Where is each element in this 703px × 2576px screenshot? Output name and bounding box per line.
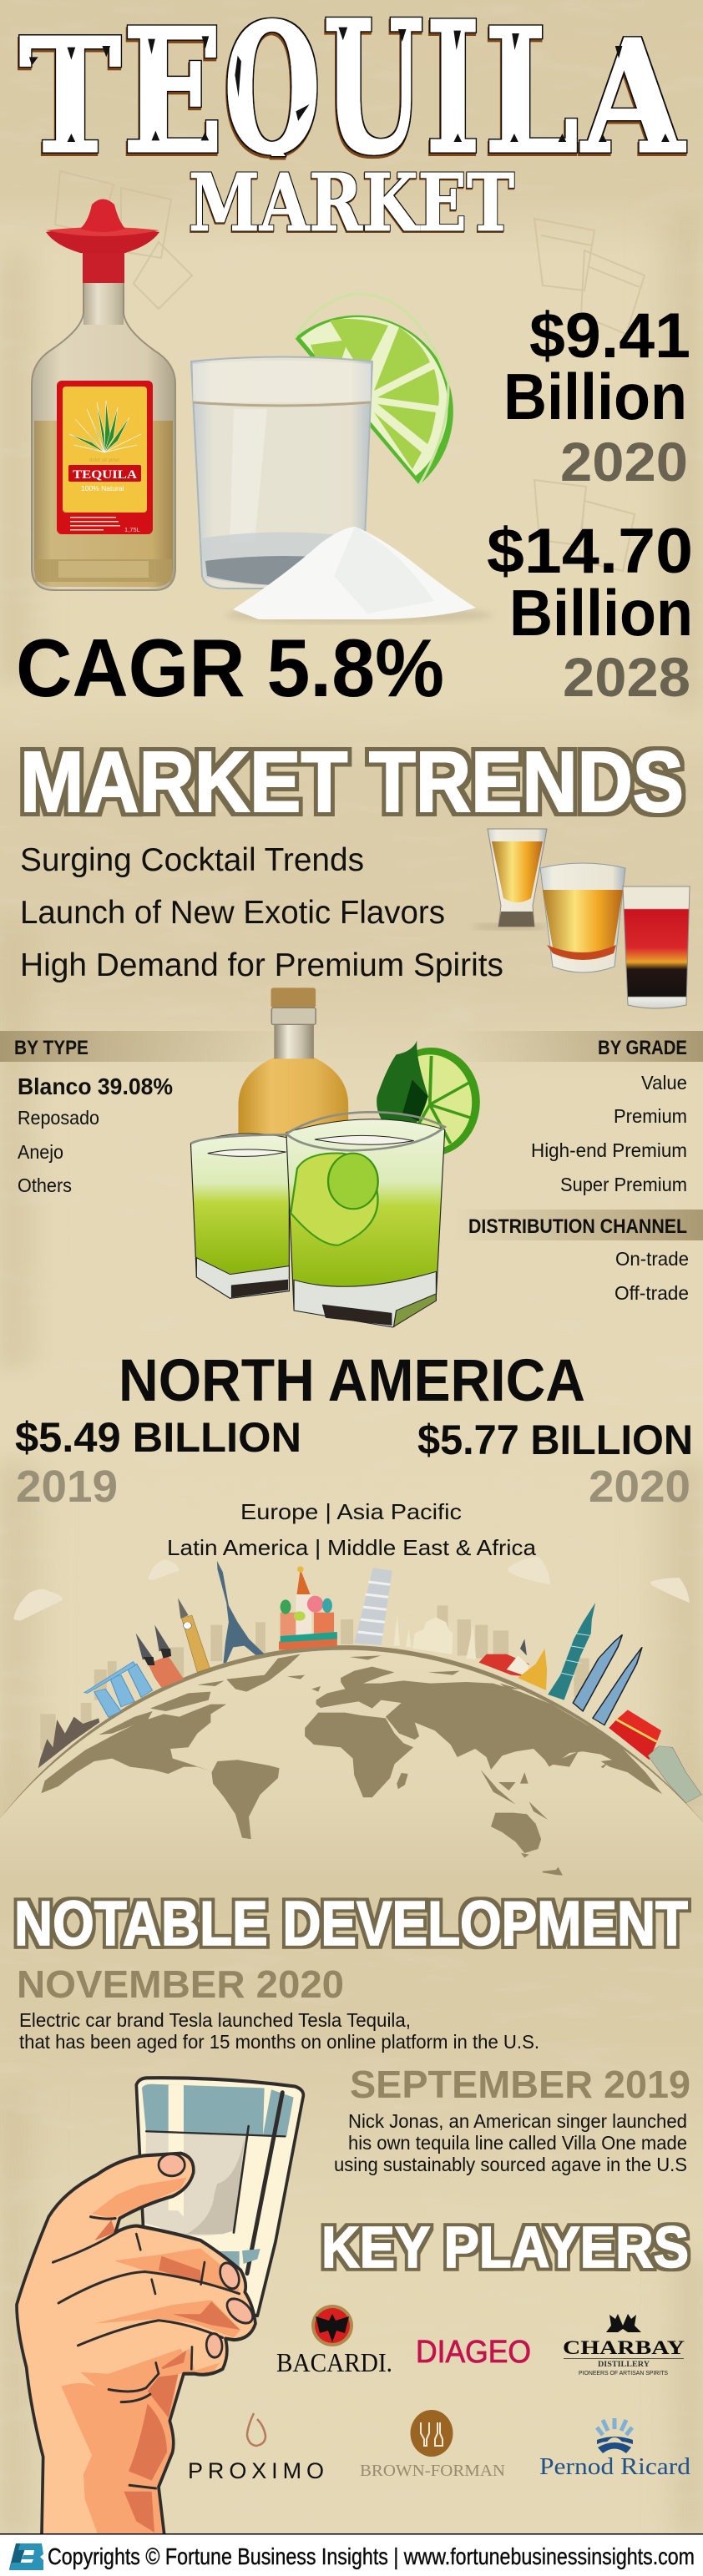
illustration: hand holding shot glass (17, 2078, 303, 2534)
continents (41, 1654, 662, 1876)
illustration: salt pile (225, 527, 493, 624)
other regions: Latin America | Middle East & Africa (167, 1535, 537, 1560)
label agave plant (69, 401, 141, 452)
segment list: by grade: Premium (614, 1105, 687, 1127)
market size 2028: $14.70 (487, 516, 693, 587)
logo: charbay (563, 2314, 685, 2376)
north america 2020 value: $5.77 BILLION (417, 1417, 693, 1463)
market size 2020 (503, 301, 690, 492)
market size 2020: Billion (503, 360, 687, 433)
landmark: marina bay sands (84, 1662, 153, 1717)
landmark: golden buddha (518, 1649, 547, 1690)
other regions: Europe | Asia Pacific (240, 1499, 462, 1524)
logo: bacardi (276, 2305, 392, 2377)
logo: pernod ricard: Pernod Ricard (539, 2454, 690, 2480)
landmark: leaning tower of pisa (354, 1568, 392, 1645)
development: november 2020: NOVEMBER 2020 (17, 1962, 344, 2006)
illustration: glass (191, 357, 372, 588)
market size 2028: 2028 (563, 646, 690, 708)
market size 2028 (487, 516, 693, 708)
segment list: by grade: High-end Premium (531, 1139, 687, 1161)
title: TEQUILA (18, 17, 688, 160)
title: TEQUILA: T (19, 4, 121, 189)
landmark: big ben (178, 1598, 210, 1672)
segment list: distribution: Off-trade (614, 1282, 689, 1304)
north america 2019 value (15, 1414, 301, 1512)
north america 2019 value: 2019 (16, 1462, 118, 1512)
segment list: distribution (614, 1248, 689, 1304)
logo: charbay: CHARBAY (563, 2337, 685, 2358)
left glass (190, 1134, 289, 1298)
segment band: by grade (451, 1031, 703, 1062)
logo: bacardi: BACARDI. (276, 2347, 392, 2377)
market trends list: Launch of New Exotic Flavors (20, 895, 445, 931)
segment band: by type: BY TYPE (14, 1037, 89, 1059)
segment list: by grade (531, 1072, 687, 1195)
illustration: tequila bottle with sombrero: 1,75L (124, 526, 140, 533)
logo: brown-forman (360, 2410, 505, 2480)
illustration: tequila bottle with sombrero: TEQUILA (73, 468, 137, 482)
market trends list: Surging Cocktail Trends (20, 842, 364, 878)
footer logo (9, 2543, 43, 2570)
segment list: by grade: Value (641, 1072, 687, 1094)
logo: brown-forman: BROWN-FORMAN (360, 2462, 505, 2480)
landmark: cathedral (136, 1625, 184, 1688)
development: september 2019: using sustainably sourced agave in the U.S (334, 2154, 687, 2175)
logo: charbay: DISTILLERY (598, 2361, 650, 2369)
segment band: by grade: BY GRADE (598, 1037, 687, 1059)
market size 2028: Billion (509, 576, 693, 649)
market size 2020: 2020 (560, 431, 688, 492)
landmark: taipei 101 (548, 1603, 595, 1700)
hand (17, 2154, 256, 2534)
logo: proximo (188, 2413, 324, 2483)
market trends list (20, 842, 503, 983)
gold bottle (238, 987, 348, 1158)
development: september 2019: SEPTEMBER 2019 (350, 2063, 690, 2106)
logo: diageo: DIAGEO (416, 2335, 531, 2370)
segment list: by type: Others (18, 1174, 72, 1196)
landmark: taj mahal (393, 1614, 476, 1659)
faint skyline (40, 1605, 664, 1759)
segment list: by type: Reposado (18, 1107, 99, 1129)
clouds (13, 1557, 690, 1621)
segment list: by type: Anejo (18, 1141, 63, 1163)
segment list: by type: Blanco 39.08% (18, 1073, 173, 1099)
development: september 2019: his own tequila line called Villa One made (348, 2132, 687, 2154)
landmark: st basil's cathedral (279, 1566, 337, 1650)
segment list: by grade: Super Premium (560, 1174, 687, 1195)
footer (0, 2533, 703, 2576)
title ornament notches (29, 28, 670, 142)
other regions (167, 1499, 537, 1560)
title: TEQUILA: A (580, 6, 685, 188)
segment band: distribution channel (451, 1210, 703, 1240)
market trends list: High Demand for Premium Spirits (20, 947, 503, 983)
landmark: chinese gate (609, 1710, 661, 1760)
CAGR: CAGR 5.8% (16, 622, 444, 714)
landmark: thai temple (479, 1639, 529, 1676)
landmark: eiffel tower (217, 1561, 265, 1663)
shot glass (136, 2078, 303, 2316)
illustration: globe with landmarks (0, 1557, 703, 1920)
segment list: by type (18, 1073, 173, 1196)
landmark: angkor (38, 1717, 99, 1768)
globe (0, 1645, 703, 1920)
segment band: by type (0, 1031, 292, 1062)
illustration: lime wedge (295, 294, 453, 485)
landmark: great wall (648, 1746, 701, 1803)
market size 2020: $9.41 (529, 301, 690, 371)
development: september 2019 (334, 2063, 690, 2175)
illustration: tequila bottle with sombrero (32, 199, 175, 590)
logo: charbay: PIONEERS OF ARTISAN SPIRITS (579, 2371, 668, 2376)
north america 2019 value: $5.49 BILLION (15, 1414, 301, 1461)
development: november 2020: that has been aged for 15 months on online platform in the U.S. (19, 2031, 539, 2053)
illustration: shot glasses (472, 829, 690, 1008)
north america 2020 value: 2020 (589, 1462, 690, 1512)
logo: proximo: PROXIMO (188, 2458, 324, 2483)
north america 2020 value (417, 1417, 693, 1512)
development: november 2020 (17, 1962, 539, 2053)
development: november 2020: Electric car brand Tesla launched Tesla Tequila, (19, 2009, 411, 2031)
landmark: petronas towers (573, 1634, 642, 1725)
segment list: distribution: On-trade (615, 1248, 689, 1270)
logo: pernod ricard (539, 2418, 690, 2480)
title: MARKET: MARKET (189, 157, 514, 250)
lime slice and mint (377, 1041, 480, 1156)
illustration: cocktails with bottle (190, 987, 480, 1327)
illustration: tequila bottle with sombrero: dolor sit amet (89, 458, 119, 463)
development: september 2019: Nick Jonas, an American singer launched (348, 2110, 687, 2132)
right glass (286, 1112, 445, 1327)
region: north america heading: NORTH AMERICA (119, 1348, 585, 1414)
illustration: tequila bottle with sombrero: 100% Natural (81, 484, 124, 492)
